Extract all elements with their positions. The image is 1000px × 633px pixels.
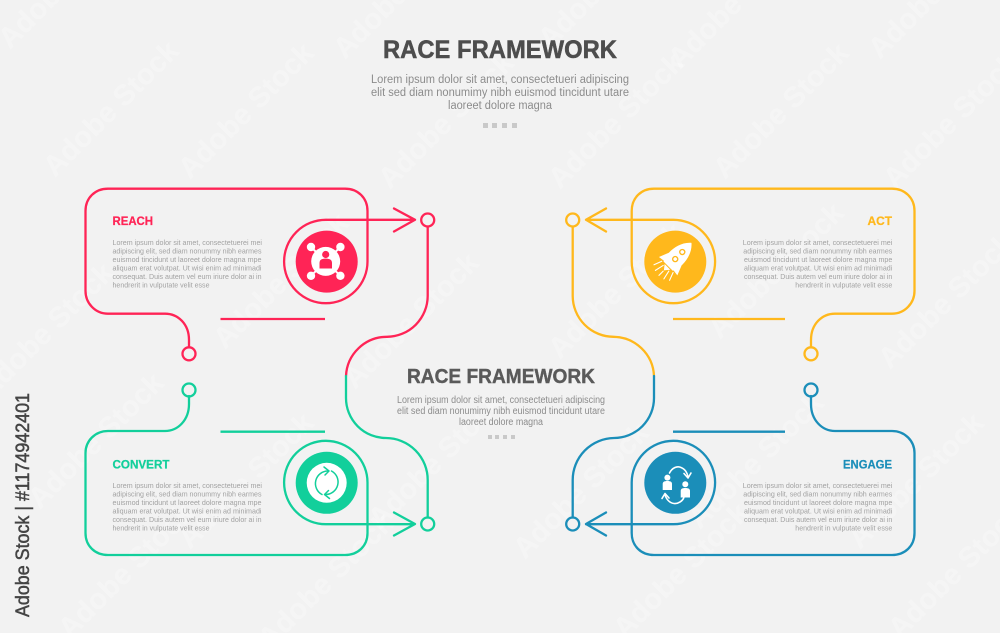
stock credit: Adobe Stock | #1174942401 (13, 393, 34, 617)
act body: consequat. Duis autem vel eum iriure dolor ai in (744, 272, 892, 281)
engage body: Lorem ipsum dolor sit amet, consectetuerei mei (743, 481, 893, 490)
reach body: consequat. Duis autem vel eum iriure dolor ai in (112, 272, 262, 281)
act outline (586, 189, 914, 347)
act body: euismod tincidunt ut laoreet dolore magna mpe (744, 255, 892, 264)
text: Adobe Stock (22, 366, 171, 515)
panel: engage (566, 376, 914, 555)
icon: network person (296, 231, 358, 293)
panel: act (566, 189, 914, 376)
convert start node (182, 384, 196, 396)
text: Adobe Stock (542, 46, 691, 195)
engage body: euismod tincidunt ut laoreet dolore magna mpe (744, 498, 892, 507)
act body: hendrerit in vulputate velit esse (795, 280, 892, 289)
reach body (112, 238, 262, 289)
center text: laoreet dolore magna (459, 417, 543, 428)
reach outline (86, 189, 415, 347)
intro text: elit sed diam nonumimy nibh euismod tincidunt utare (371, 87, 629, 99)
convert heading: CONVERT (112, 458, 170, 472)
icon: refresh (296, 452, 358, 514)
engage connector (573, 376, 654, 518)
convert body: Lorem ipsum dolor sit amet, consectetuerei mei (112, 481, 262, 490)
engage body: aliquam erat volutpat. Ut wisi enim ad minimadi (744, 506, 893, 515)
text: Adobe Stock (702, 196, 851, 345)
top dots (483, 123, 517, 128)
center text: Lorem ipsum dolor sit amet, consectetueri adipiscing (397, 395, 605, 406)
reach body: hendrerit in vulputate velit esse (112, 280, 210, 289)
act body (743, 238, 893, 289)
reach connector (346, 226, 428, 376)
reach body: aliquam erat volutpat. Ut wisi enim ad minimadi (112, 263, 262, 272)
convert body (112, 481, 262, 532)
engage start node (804, 384, 818, 396)
reach heading: REACH (112, 214, 153, 228)
engage body: hendrerit in vulputate velit esse (795, 523, 892, 532)
intro text (371, 74, 629, 112)
engage end node (566, 518, 579, 530)
intro text: Lorem ipsum dolor sit amet, consectetueri adipiscing (371, 74, 629, 86)
convert body: aliquam erat volutpat. Ut wisi enim ad minimadi (112, 506, 262, 515)
text: Adobe Stock (682, 386, 831, 535)
intro text: laoreet dolore magna (448, 100, 553, 112)
center text: elit sed diam nonumimy nibh euismod tincidunt utare (397, 406, 606, 417)
panel: reach (86, 189, 434, 376)
center dots (488, 435, 515, 439)
act heading: ACT (868, 214, 893, 228)
convert end node (421, 518, 434, 530)
icon: people exchange (644, 452, 706, 514)
text: Adobe Stock (362, 386, 511, 535)
text: Adobe Stock (337, 246, 486, 395)
panel: convert (86, 376, 434, 555)
convert body: euismod tincidunt ut laoreet dolore magna mpe (112, 498, 262, 507)
reach divider (220, 318, 325, 320)
act end node (566, 214, 579, 226)
reach end node (421, 214, 434, 226)
text: Adobe Stock (172, 36, 321, 185)
convert divider (220, 431, 325, 433)
engage body: adipiscing elit, sed diam nonummy nibh earmes (743, 490, 893, 498)
convert connector (346, 376, 428, 518)
text: Adobe Stock (542, 216, 691, 365)
center text (397, 395, 606, 428)
act start node (804, 347, 818, 360)
icon: rocket (644, 231, 706, 293)
convert body: consequat. Duis autem vel eum iriure dolor ai in (112, 515, 262, 524)
reach body: Lorem ipsum dolor sit amet, consectetuerei mei (112, 238, 262, 247)
text: Adobe Stock (507, 416, 656, 565)
text: Adobe Stock (207, 206, 356, 355)
convert body: hendrerit in vulputate velit esse (112, 523, 210, 532)
engage body (743, 481, 893, 532)
reach body: euismod tincidunt ut laoreet dolore magna mpe (112, 255, 262, 264)
act body: adipiscing elit, sed diam nonummy nibh earmes (743, 246, 893, 256)
reach start node (182, 347, 196, 360)
engage body: consequat. Duis autem vel eum iriure dolor ai in (744, 515, 892, 524)
text: Adobe Stock (37, 34, 186, 183)
engage divider (673, 431, 785, 433)
text: Adobe Stock (172, 406, 321, 555)
engage heading: ENGAGE (843, 458, 892, 472)
text: Adobe Stock (372, 46, 521, 195)
text: Adobe Stock (707, 36, 856, 185)
title: RACE FRAMEWORK (383, 36, 617, 64)
reach body: adipiscing elit, sed diam nonummy nibh earmes (112, 246, 262, 256)
center heading: RACE FRAMEWORK (407, 365, 595, 388)
act connector (573, 226, 654, 376)
text: Adobe Stock (842, 406, 991, 555)
act body: Lorem ipsum dolor sit amet, consectetuerei mei (743, 238, 893, 247)
act body: aliquam erat volutpat. Ut wisi enim ad minimadi (744, 263, 893, 272)
act divider (673, 318, 785, 320)
engage outline (586, 396, 914, 555)
convert outline (86, 396, 415, 555)
convert body: adipiscing elit, sed diam nonummy nibh earmes (112, 490, 262, 498)
